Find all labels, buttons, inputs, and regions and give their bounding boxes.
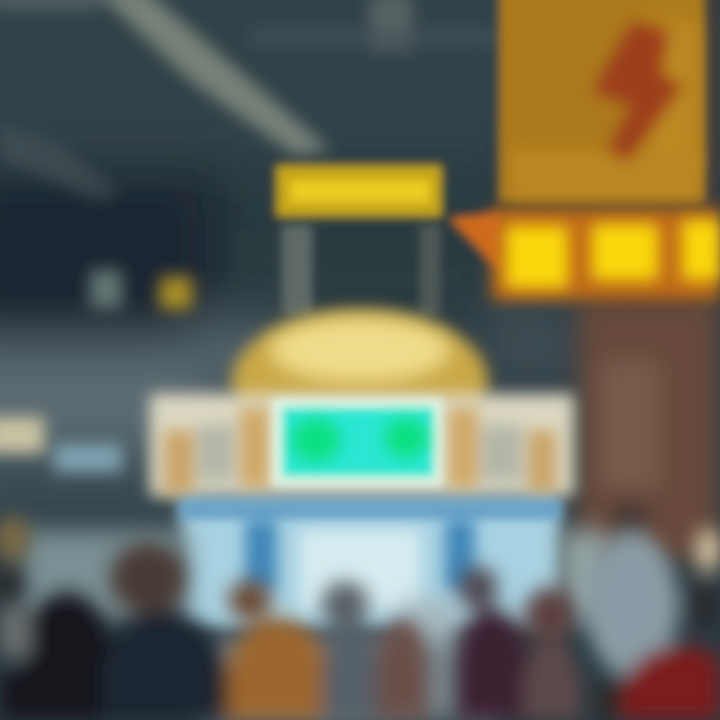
person: gray centre [321,581,428,720]
kiosk dome [232,310,488,454]
person: grey-blue right [586,500,678,720]
small wall lights [0,270,192,472]
icon: red symbol [592,22,682,160]
person: red right [622,528,720,720]
crowd silhouettes [0,500,720,720]
ceiling beams [0,0,500,200]
yellow sign above dome [276,165,442,217]
kiosk base: blue counter [180,498,560,628]
kiosk drum [150,394,574,496]
floor [20,530,610,720]
kiosk supports [282,225,440,315]
person: left dark [0,542,230,720]
person: maroon [456,566,580,720]
person: far left [0,516,30,656]
hanging banner: yellow with red symbol [499,0,720,210]
orange sign band with yellow blocks [448,208,720,300]
kiosk screen: teal with green glow [272,398,442,486]
pillar [578,300,720,560]
person: orange coat [228,580,328,720]
